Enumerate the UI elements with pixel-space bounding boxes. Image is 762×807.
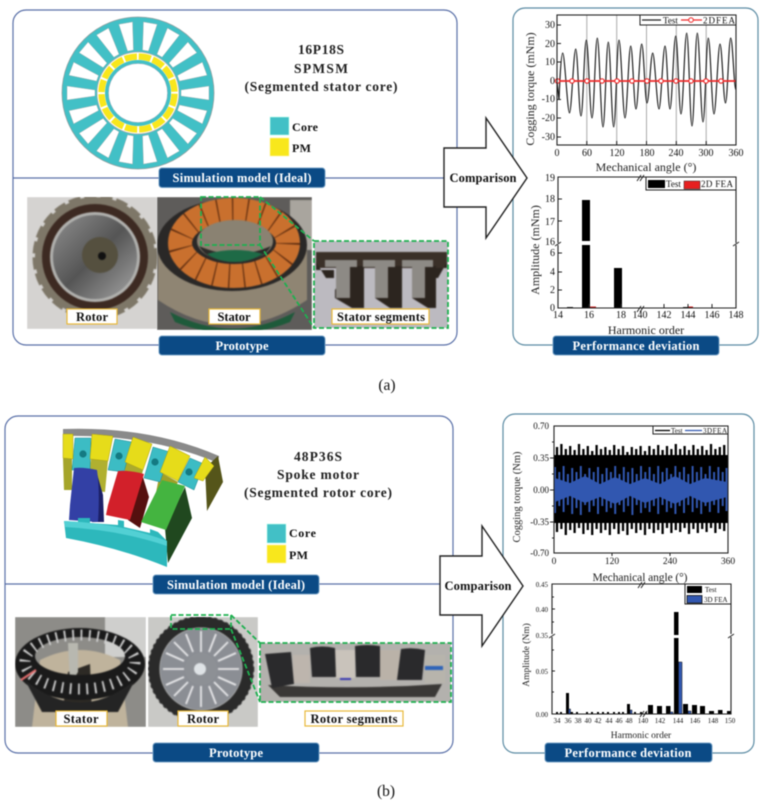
chart: harmonic amplitude (b): 48 bbox=[626, 717, 633, 725]
badge: Prototype (a) bbox=[159, 336, 325, 355]
callout: zoom box on stator (a) bbox=[201, 197, 448, 328]
panel: (b) performance deviation bbox=[503, 414, 754, 762]
chart: cogging torque (a): -20 bbox=[542, 113, 555, 124]
badge: Simulation model (a): Simulation model (Ideal) bbox=[172, 171, 312, 185]
chart: harmonic amplitude (a): 14 bbox=[553, 310, 563, 321]
chart: harmonic amplitude (a): 144 bbox=[680, 310, 696, 321]
label: Rotor (a) bbox=[67, 309, 117, 324]
legend: core and PM (a): PM bbox=[292, 141, 311, 155]
chart: cogging torque (b): 0.00 bbox=[533, 485, 550, 495]
chart: cogging torque (b): -0.70 bbox=[530, 548, 549, 558]
chart: harmonic amplitude (a): 16 bbox=[584, 310, 594, 321]
chart: cogging torque (a): Cogging torque (mNm) bbox=[523, 32, 537, 146]
chart: cogging torque (a) bbox=[523, 15, 744, 174]
photo: rotor (a) bbox=[27, 197, 157, 329]
legend: core and PM (a) bbox=[270, 117, 319, 156]
chart: cogging torque (b): -0.35 bbox=[530, 517, 549, 527]
legend: core and PM (b): PM bbox=[289, 548, 308, 562]
chart: cogging torque (b): 3DFEA bbox=[703, 427, 727, 435]
chart: cogging torque (a): 0 bbox=[554, 148, 560, 159]
badge: Performance deviation (b): Performance deviation bbox=[564, 746, 692, 760]
chart: harmonic amplitude (a): Amplitude (mNm) bbox=[528, 205, 542, 295]
legend: core and PM (b) bbox=[267, 524, 317, 563]
chart: harmonic amplitude (a): 0 bbox=[550, 303, 555, 314]
chart: harmonic amplitude (b): 44 bbox=[606, 717, 613, 725]
chart: harmonic amplitude (a): 18 bbox=[616, 310, 626, 321]
label: Stator (a) bbox=[209, 309, 260, 324]
badge: Performance deviation (a): Performance deviation bbox=[572, 339, 700, 353]
label: Stator (a): Stator bbox=[218, 310, 251, 324]
icon: 16P18S stator and rotor cross-section bbox=[62, 17, 214, 169]
chart: cogging torque (a): 30 bbox=[545, 20, 555, 31]
divider line (b) bbox=[5, 583, 453, 585]
chart: cogging torque (a): Mechanical angle (°) bbox=[596, 160, 696, 174]
chart: harmonic amplitude (b): 148 bbox=[708, 717, 719, 725]
chart: harmonic amplitude (b): 38 bbox=[574, 717, 582, 725]
chart: harmonic amplitude (b): 140 bbox=[638, 717, 649, 725]
chart: harmonic amplitude (b): 150 bbox=[725, 717, 736, 725]
chart: cogging torque (b): Test bbox=[671, 427, 683, 435]
chart: harmonic amplitude (a): 17 bbox=[545, 217, 555, 228]
heading: motor type (b) bbox=[244, 449, 392, 500]
callout: zoom box on rotor (b) bbox=[171, 615, 451, 702]
chart: harmonic amplitude (b): 0.05 bbox=[536, 668, 548, 676]
heading: motor type (b): 48P36S bbox=[294, 449, 342, 464]
badge: Performance deviation (a) bbox=[553, 336, 719, 355]
label: Rotor segments: Rotor segments bbox=[310, 712, 398, 726]
panel frame (b) left bbox=[5, 416, 453, 753]
badge: Performance deviation (b) bbox=[545, 743, 712, 762]
chart: harmonic amplitude (a): 148 bbox=[728, 310, 744, 321]
heading: motor type (a) bbox=[244, 42, 398, 94]
label: Rotor (b): Rotor bbox=[187, 712, 219, 726]
chart: harmonic amplitude (b) bbox=[521, 581, 736, 741]
chart: cogging torque (a): 360 bbox=[728, 148, 744, 159]
chart: harmonic amplitude (a): Harmonic order bbox=[608, 323, 684, 337]
legend: core and PM (a): Core bbox=[292, 120, 319, 134]
chart: cogging torque (b): Mechanical angle (°) bbox=[592, 572, 688, 584]
chart: harmonic amplitude (b): 36 bbox=[564, 717, 572, 725]
chart: harmonic amplitude (b): Harmonic order bbox=[611, 731, 672, 741]
legend: core and PM (b): Core bbox=[289, 526, 317, 540]
panel: (a) simulation model and prototype bbox=[13, 10, 457, 355]
chart: harmonic amplitude (b): 0.35 bbox=[536, 632, 548, 640]
photo: stator (a) bbox=[157, 197, 312, 334]
chart: harmonic amplitude (b): 34 bbox=[554, 717, 561, 725]
chart: cogging torque (b): 240 bbox=[663, 557, 677, 567]
divider line (a) bbox=[13, 177, 457, 179]
badge: Simulation model (a) bbox=[159, 168, 325, 188]
icon: 48P36S 3D spoke motor model bbox=[63, 429, 223, 567]
arrow: comparison (a) bbox=[444, 118, 527, 238]
chart: harmonic amplitude (b): 46 bbox=[616, 717, 623, 725]
chart: cogging torque (a): 180 bbox=[640, 148, 654, 159]
chart: cogging torque (b): 0.35 bbox=[533, 453, 550, 463]
panel frame (a) left bbox=[13, 10, 457, 345]
chart: cogging torque (a): 10 bbox=[545, 57, 555, 68]
badge: Simulation model (b): Simulation model (Ideal) bbox=[167, 578, 305, 592]
chart: cogging torque (a): 120 bbox=[610, 148, 624, 159]
heading: motor type (b): Spoke motor bbox=[277, 467, 359, 482]
arrow: comparison (a): Comparison bbox=[450, 171, 517, 185]
chart: cogging torque (a): -10 bbox=[542, 94, 555, 105]
badge: Simulation model (b) bbox=[153, 575, 319, 594]
chart: harmonic amplitude (b): 0.45 bbox=[536, 581, 548, 589]
chart: harmonic amplitude (a): 18 bbox=[545, 194, 555, 205]
chart: harmonic amplitude (a): Test bbox=[666, 179, 681, 189]
chart: harmonic amplitude (b): 0.00 bbox=[536, 711, 548, 719]
heading: motor type (a): 16P18S bbox=[298, 42, 344, 57]
chart: harmonic amplitude (b): 144 bbox=[673, 717, 684, 725]
chart: cogging torque (b): 0 bbox=[552, 557, 557, 567]
chart: harmonic amplitude (b): 42 bbox=[594, 717, 602, 725]
photo: stator (b) bbox=[15, 617, 146, 727]
chart: harmonic amplitude (a): 2D FEA bbox=[701, 179, 734, 189]
chart: harmonic amplitude (a) bbox=[528, 173, 744, 337]
chart: harmonic amplitude (b): 0.40 bbox=[536, 606, 548, 614]
panel frame (b) right bbox=[503, 414, 754, 753]
chart: cogging torque (b): Cogging torque (Nm) bbox=[512, 451, 523, 542]
chart: harmonic amplitude (b): 146 bbox=[690, 717, 701, 725]
photo: rotor (b) bbox=[148, 617, 258, 727]
chart: harmonic amplitude (a): 2 bbox=[550, 285, 555, 296]
chart: harmonic amplitude (b): Amplitude (Nm) bbox=[521, 623, 532, 687]
panel: (b) simulation model and prototype bbox=[5, 416, 453, 762]
chart: harmonic amplitude (a): 16 bbox=[545, 237, 555, 248]
badge: Prototype (b) bbox=[153, 743, 319, 762]
chart: cogging torque (a): Test bbox=[663, 16, 678, 26]
chart: cogging torque (a): 0 bbox=[550, 76, 555, 87]
chart: harmonic amplitude (a): 4 bbox=[550, 267, 555, 278]
arrow: comparison (b) bbox=[440, 526, 523, 646]
chart: cogging torque (a): 300 bbox=[698, 148, 714, 159]
panel frame (a) right bbox=[513, 8, 758, 345]
heading: motor type (a): (Segmented stator core) bbox=[244, 79, 398, 94]
chart: cogging torque (b): 0.70 bbox=[533, 421, 550, 431]
chart: harmonic amplitude (a): 140 bbox=[632, 310, 648, 321]
label: Rotor (a): Rotor bbox=[76, 310, 108, 324]
chart: cogging torque (a): 20 bbox=[545, 39, 555, 50]
badge: Prototype (a): Prototype bbox=[216, 339, 269, 353]
chart: cogging torque (a): 60 bbox=[582, 148, 592, 159]
photo: rotor segments bbox=[260, 643, 451, 702]
chart: harmonic amplitude (b): 40 bbox=[584, 717, 592, 725]
photo: stator segments (a) bbox=[314, 241, 448, 328]
label: Stator (b): Stator bbox=[64, 712, 99, 726]
chart: cogging torque (b) bbox=[512, 421, 735, 584]
chart: harmonic amplitude (a): 19 bbox=[545, 173, 555, 184]
chart: cogging torque (a): -30 bbox=[542, 132, 555, 143]
chart: cogging torque (a): 240 bbox=[668, 148, 684, 159]
label: Stator (b) bbox=[56, 711, 107, 726]
chart: harmonic amplitude (b): 142 bbox=[655, 717, 666, 725]
heading: motor type (b): (Segmented rotor core) bbox=[244, 485, 392, 500]
arrow: comparison (b): Comparison bbox=[444, 579, 512, 593]
chart: harmonic amplitude (a): 6 bbox=[550, 248, 555, 259]
label: Rotor (b) bbox=[178, 711, 228, 726]
heading: motor type (a): SPMSM bbox=[294, 61, 348, 76]
caption: (b): (b) bbox=[377, 783, 395, 800]
chart: harmonic amplitude (a): 142 bbox=[656, 310, 672, 321]
badge: Prototype (b): Prototype bbox=[209, 746, 263, 760]
chart: cogging torque (b): 120 bbox=[605, 557, 619, 567]
label: Stator segments: Stator segments bbox=[337, 310, 425, 324]
chart: cogging torque (b): 360 bbox=[721, 557, 735, 567]
chart: harmonic amplitude (b): Test bbox=[705, 586, 717, 594]
caption: (a): (a) bbox=[378, 377, 396, 394]
panel: (a) performance deviation bbox=[513, 8, 758, 355]
chart: cogging torque (a): 2DFEA bbox=[703, 16, 736, 26]
chart: harmonic amplitude (b): 3D FEA bbox=[704, 596, 728, 604]
chart: harmonic amplitude (a): 146 bbox=[704, 310, 720, 321]
